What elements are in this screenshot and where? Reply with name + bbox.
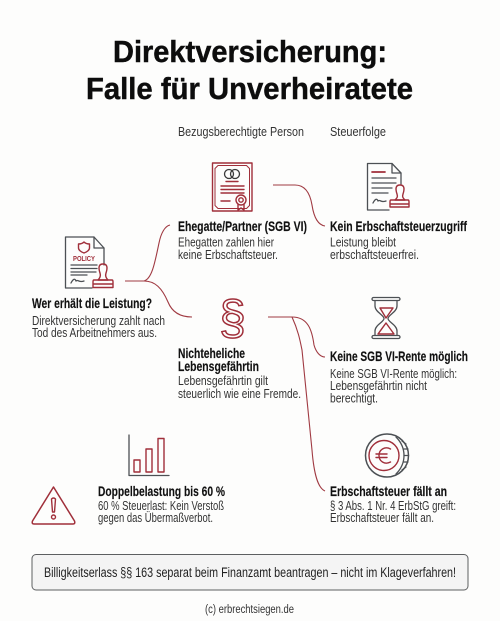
column heading: Steuerfolge: Steuerfolge bbox=[330, 124, 386, 139]
icon: warning triangle bbox=[32, 487, 75, 524]
text block: Keine SGB VI-Rente: berechtigt. bbox=[330, 390, 378, 406]
connector: partner to inheritance tax due bbox=[292, 317, 325, 491]
text block: Erbschaftsteuer fällt an: § 3 Abs. 1 Nr. 4 ErbStG greift: bbox=[330, 498, 456, 513]
text block: Erbschaftsteuer fällt an bbox=[330, 483, 456, 525]
text block: Wer erhält die Leistung: Tod des Arbeitnehmers aus. bbox=[32, 325, 157, 340]
text block: Keine SGB VI-Rente bbox=[330, 348, 468, 406]
text block: Erbschaftsteuer fällt an: Erbschaftsteuer fällt an bbox=[330, 483, 447, 499]
text block: Doppelbelastung: Doppelbelastung bis 60 % bbox=[98, 483, 225, 499]
text block: Nichteheliche Lebensgefährtin: Lebensgefährtin bbox=[178, 358, 259, 374]
connector: partner to no pension bbox=[268, 317, 325, 357]
title: Direktversicherung: bbox=[113, 34, 387, 69]
icon: document with stamp bbox=[368, 164, 409, 210]
text block: Keine SGB VI-Rente: Keine SGB VI-Rente möglich: bbox=[330, 366, 457, 381]
connector: policy to partner bbox=[144, 281, 192, 317]
title bbox=[86, 34, 413, 106]
icon: euro coin bbox=[366, 434, 408, 477]
text block: Nichteheliche Lebensgefährtin bbox=[178, 345, 301, 401]
text block: Erbschaftsteuer fällt an: Erbschaftsteuer fällt an. bbox=[330, 510, 434, 525]
text block: Ehegatte/Partner: keine Erbschaftsteuer. bbox=[178, 247, 278, 262]
text block: Wer erhält die Leistung: Direktversicherung zahlt nach bbox=[32, 313, 165, 328]
text block: Ehegatte/Partner: Ehegatte/Partner (SGB VI) bbox=[178, 218, 307, 234]
icon: policy document with stamp: POLICY bbox=[73, 254, 95, 263]
text block: Keine SGB VI-Rente: Lebensgefährtin nicht bbox=[330, 378, 427, 393]
title: Falle für Unverheiratete bbox=[86, 71, 413, 106]
text block: Nichteheliche Lebensgefährtin: steuerlich wie eine Fremde. bbox=[178, 386, 301, 401]
text block: Wer erhält die Leistung: Wer erhält die Leistung? bbox=[32, 295, 152, 311]
text block: Kein Erbschaftsteuerzugriff bbox=[330, 218, 467, 262]
icon: bar chart bbox=[129, 435, 169, 476]
connector: policy to spouse bbox=[125, 225, 170, 281]
column heading: Bezugsberechtigte Person: Bezugsberechtigte Person bbox=[178, 124, 304, 139]
text block: Doppelbelastung bbox=[98, 483, 225, 525]
text block: Doppelbelastung: gegen das Übermaßverbot. bbox=[98, 510, 213, 525]
text block: Kein Erbschaftsteuerzugriff: erbschaftsteuerfrei. bbox=[330, 247, 419, 262]
icon: hourglass bbox=[372, 298, 400, 338]
text block: Doppelbelastung: 60 % Steuerlast: Kein Verstoß bbox=[98, 498, 224, 513]
connector: spouse to no inheritance tax bbox=[273, 185, 325, 226]
footer credit: (c) erbrechtsiegen.de bbox=[205, 604, 294, 616]
text block: Nichteheliche Lebensgefährtin: Lebensgefährtin gilt bbox=[178, 373, 268, 388]
icon: paragraph sign: § bbox=[219, 292, 246, 345]
text block: Nichteheliche Lebensgefährtin: Nichteheliche bbox=[178, 345, 245, 361]
text block: Kein Erbschaftsteuerzugriff: Leistung bleibt bbox=[330, 234, 396, 250]
callout: Billigkeitserlass bbox=[32, 554, 468, 590]
icon: marriage certificate bbox=[212, 163, 252, 211]
text block: Wer erhält die Leistung bbox=[32, 295, 165, 340]
text block: Ehegatte/Partner: Ehegatten zahlen hier bbox=[178, 234, 275, 250]
text block: Ehegatte/Partner bbox=[178, 218, 307, 262]
icon: policy document with stamp bbox=[66, 237, 113, 288]
